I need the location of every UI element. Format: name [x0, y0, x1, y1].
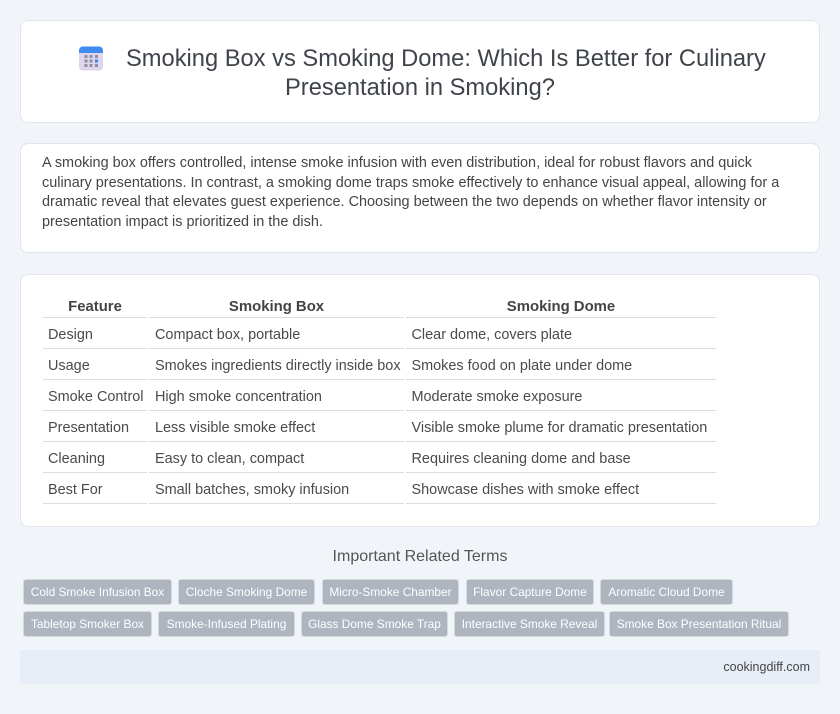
row: Usage [48, 358, 632, 374]
tag list: Aromatic Cloud Dome [608, 585, 725, 599]
intro paragraph: culinary presentations. In contrast, a smoking dome traps smoke effectively to enhance visual appeal, allowing for a [42, 175, 779, 191]
intro paragraph [42, 155, 780, 230]
row: Design [48, 327, 572, 343]
row: Design: Design [48, 327, 93, 343]
tag list: Micro-Smoke Chamber [329, 585, 452, 599]
row: Design: Compact box, portable [155, 327, 300, 343]
row: Smoke Control [48, 389, 582, 405]
row: Presentation: Less visible smoke effect [155, 420, 315, 436]
tag list: Interactive Smoke Reveal [462, 617, 597, 631]
row: Smoke Control: Moderate smoke exposure [412, 389, 582, 405]
row: Design: Clear dome, covers plate [412, 327, 572, 343]
row: Cleaning: Easy to clean, compact [155, 451, 304, 467]
table header: Smoking Dome: Smoking Dome [507, 299, 615, 315]
title: Presentation in Smoking? [285, 75, 555, 101]
title: Smoking Box vs Smoking Dome: Which Is Better for Culinary [126, 46, 766, 72]
tag list: Glass Dome Smoke Trap [308, 617, 441, 631]
title [126, 46, 766, 101]
tag list: Smoke-Infused Plating [167, 617, 286, 631]
row: Usage: Smokes ingredients directly inside box [155, 358, 401, 374]
heading: Important Related Terms: Important Related Terms [333, 548, 507, 565]
intro paragraph: A smoking box offers controlled, intense smoke infusion with even distribution, ideal for robust flavors and quick [42, 155, 752, 171]
table header: Smoking Box: Smoking Box [229, 299, 324, 315]
row: Cleaning: Cleaning [48, 451, 105, 467]
intro paragraph: presentation impact is prioritized in the dish. [42, 214, 323, 230]
row: Usage: Usage [48, 358, 90, 374]
icon: calendar [79, 46, 103, 70]
row: Presentation [48, 420, 707, 436]
row: Smoke Control: High smoke concentration [155, 389, 322, 405]
tag list [23, 579, 789, 637]
row: Best For [48, 482, 640, 498]
panel: intro text [20, 143, 820, 253]
row: Cleaning: Requires cleaning dome and base [412, 451, 631, 467]
row: Best For: Showcase dishes with smoke effect [412, 482, 639, 498]
panel: comparison table [20, 274, 820, 527]
row: Smoke Control: Smoke Control [48, 389, 144, 405]
intro paragraph: dramatic reveal that elevates guest experience. Choosing between the two depends on whether flavor intensity or [42, 194, 767, 210]
tag list: Cloche Smoking Dome [186, 585, 307, 599]
tag list: Tabletop Smoker Box [31, 617, 144, 631]
table header: Feature: Feature [68, 299, 122, 315]
tag list: Smoke Box Presentation Ritual [617, 617, 781, 631]
row: Best For: Best For [48, 482, 103, 498]
footer text: cookingdiff.com [723, 660, 810, 674]
row: Best For: Small batches, smoky infusion [155, 482, 349, 498]
tag list: Cold Smoke Infusion Box [31, 585, 164, 599]
row: Cleaning [48, 451, 631, 467]
footer bar [20, 650, 820, 684]
row: Presentation: Visible smoke plume for dramatic presentation [412, 420, 707, 436]
tag list: Flavor Capture Dome [473, 585, 587, 599]
header panel [20, 20, 820, 123]
row: Presentation: Presentation [48, 420, 129, 436]
row: Usage: Smokes food on plate under dome [412, 358, 632, 374]
